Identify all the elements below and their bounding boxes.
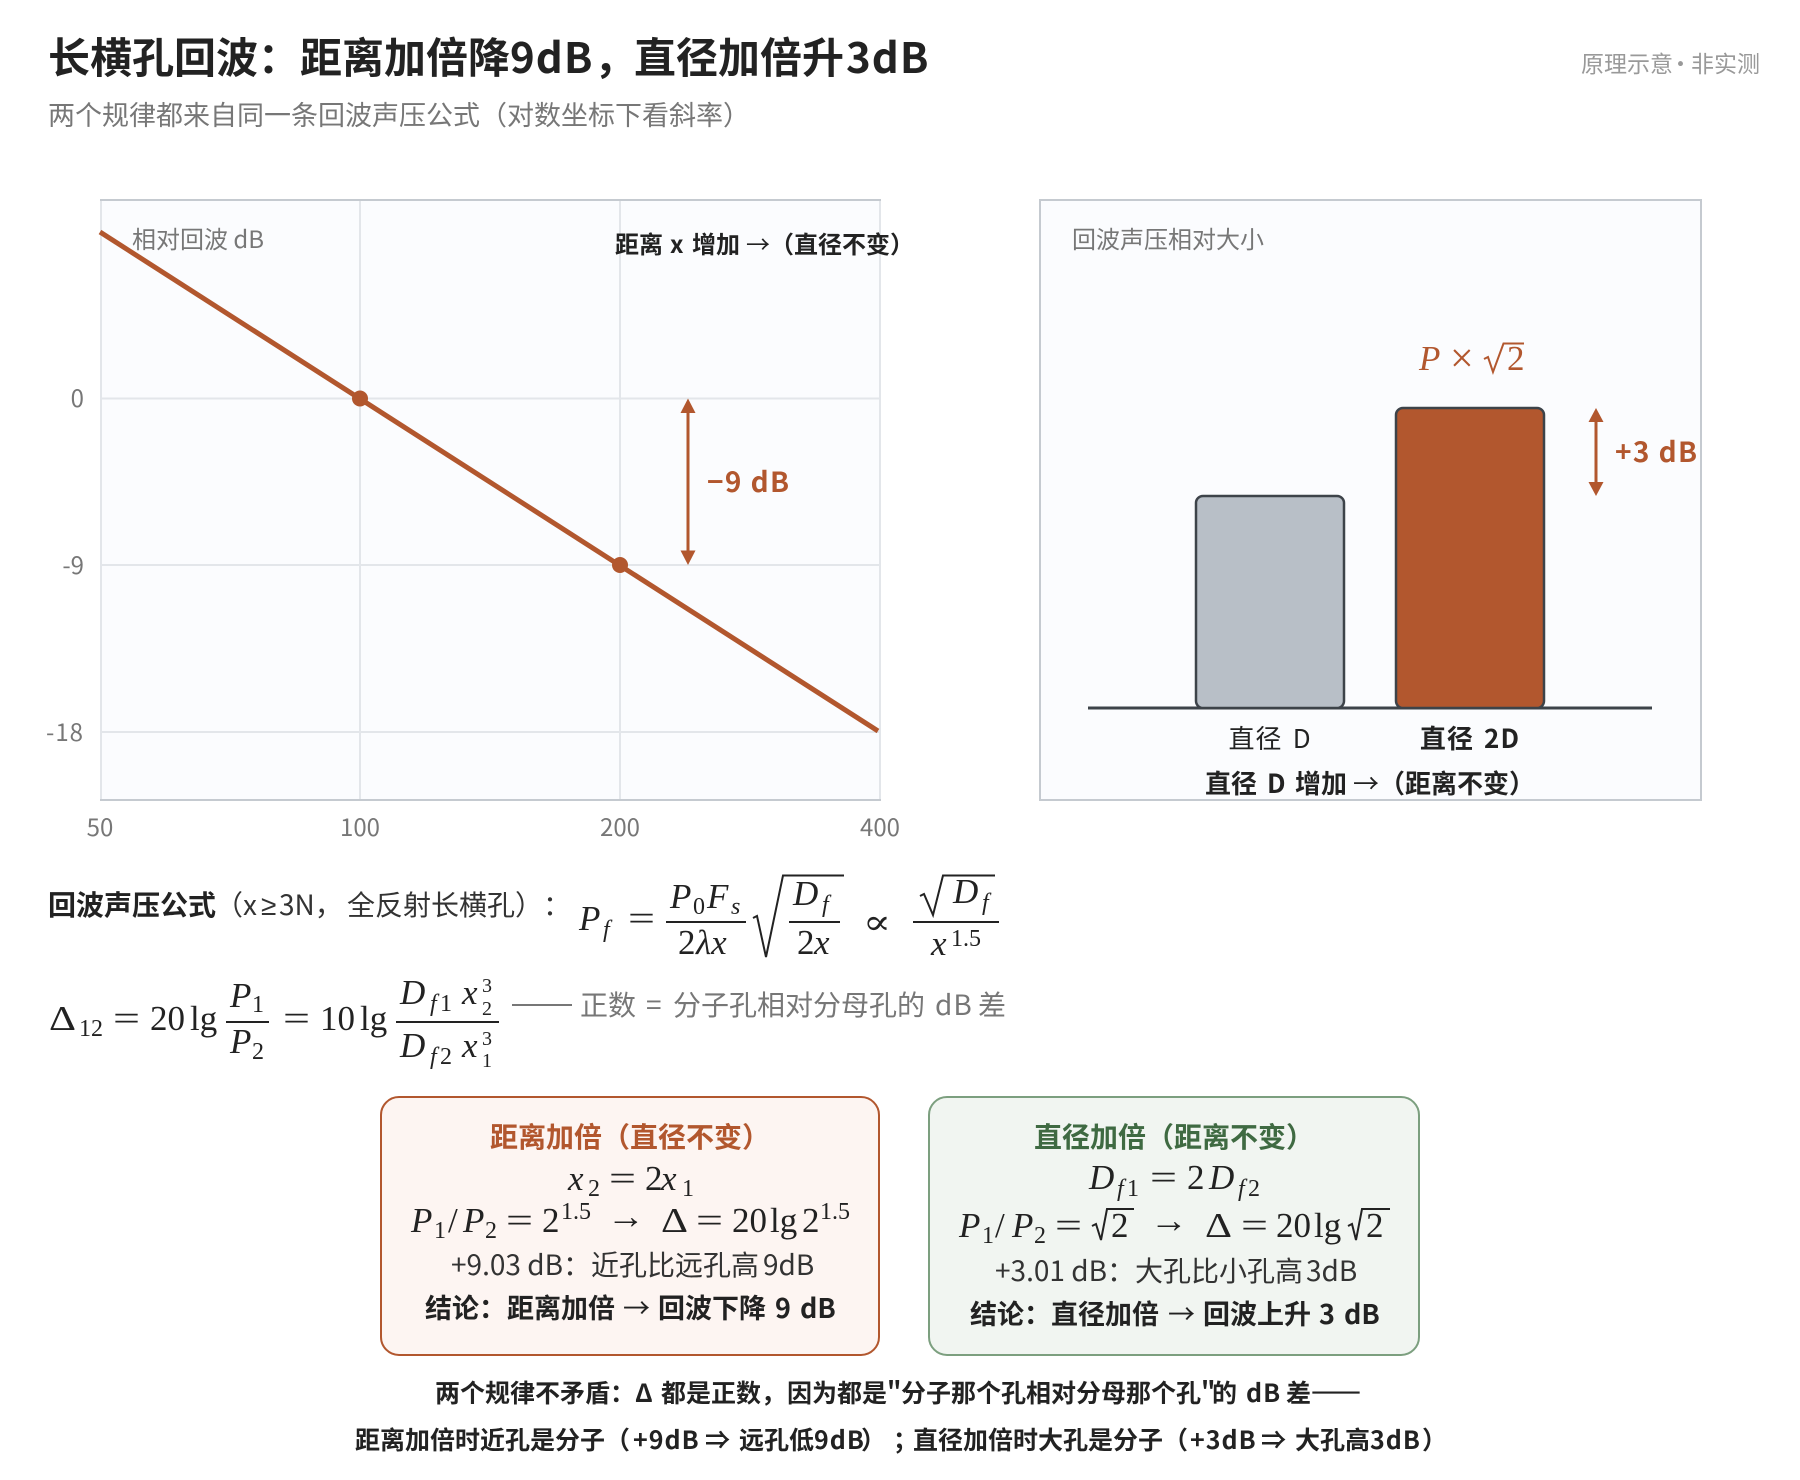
formula line 2: =: [506, 1201, 533, 1240]
formula: delta dB: 2: [440, 1044, 452, 1070]
formula line 1: f: [1238, 1176, 1248, 1202]
formula note: [512, 984, 1006, 1024]
footer note: 远孔低: [739, 1421, 814, 1457]
formula line 1: D: [1088, 1158, 1114, 1197]
footer note: 分子那个孔相对分母那个孔": [901, 1374, 1215, 1410]
arrow: minus 9 dB: [680, 398, 696, 565]
footer note: +9dB: [633, 1421, 700, 1457]
formula: echo pressure: 1.5: [951, 926, 981, 952]
footer note: ⇒: [705, 1421, 730, 1457]
label: plus 3 dB: +3 dB: [1615, 431, 1698, 471]
formula: echo pressure: D: [952, 872, 978, 911]
panel: distance doubling: [381, 1097, 879, 1355]
formula line 2: →: [607, 1197, 645, 1236]
formula: delta dB: P: [229, 976, 251, 1015]
footer note: ）: [861, 1421, 886, 1457]
formula line 2: 1: [982, 1223, 994, 1249]
formula line 2: 1.5: [561, 1199, 591, 1225]
bar: diameter 2D: [1396, 408, 1544, 708]
formula line 1: D: [1208, 1158, 1234, 1197]
conclusion: 距离加倍: [507, 1287, 615, 1326]
arrow: plus 3 dB: [1588, 408, 1604, 496]
formula: delta dB: 12: [79, 1016, 103, 1042]
chart caption: 增加: [1295, 764, 1347, 801]
x axis labels: 50: [87, 808, 113, 843]
y axis title: 相对回波 dB: [132, 220, 264, 255]
formula: delta dB: =: [283, 999, 310, 1038]
formula: echo pressure: F: [706, 877, 729, 916]
panel: diameter bar chart: [1040, 200, 1701, 801]
formula note: 差: [978, 984, 1006, 1024]
x axis labels: [87, 808, 900, 843]
conclusion: dB: [800, 1287, 836, 1326]
footer note: 大孔高: [1295, 1421, 1370, 1457]
y axis labels: -18: [46, 713, 84, 748]
formula line 2: lg: [770, 1201, 797, 1240]
note: schematic only: ·: [1669, 45, 1692, 79]
formula heading: 全反射长横孔）: [347, 884, 543, 924]
formula: P times root 2: [1418, 336, 1524, 382]
formula: delta dB: 1: [252, 992, 264, 1018]
formula line 2: 20: [732, 1201, 767, 1240]
panel title: 回波声压相对大小: [1072, 220, 1264, 255]
formula: echo pressure: f: [603, 917, 613, 943]
formula line 1: 2: [588, 1176, 600, 1202]
conclusion: 9: [775, 1287, 791, 1326]
panel: distance line chart: [46, 200, 914, 843]
y axis labels: 0: [71, 379, 84, 414]
conclusion: 回波下降: [658, 1287, 766, 1326]
conclusion: 结论：: [425, 1287, 506, 1326]
formula line 1: x: [567, 1159, 584, 1198]
formula line 1: =: [609, 1159, 636, 1198]
footer note: 的: [1212, 1374, 1237, 1410]
formula line 2: 20: [1276, 1206, 1311, 1245]
conclusion: →: [623, 1287, 650, 1326]
formula: delta dB: D: [399, 973, 425, 1012]
formula line 2: 2: [802, 1201, 820, 1240]
formula: delta dB: P: [229, 1022, 251, 1061]
formula line 1: f: [1117, 1176, 1127, 1202]
formula line 2: [410, 1197, 850, 1244]
footer note: 因为都是": [787, 1374, 901, 1410]
formula line 2: 1: [434, 1218, 446, 1244]
footer note: 两个规律不矛盾：: [435, 1374, 635, 1410]
footer note: dB: [1246, 1374, 1281, 1410]
formula: delta dB: 2: [482, 998, 492, 1020]
result: 9dB: [763, 1244, 814, 1284]
formula: echo pressure: 2: [797, 923, 814, 962]
formula: delta dB: 1: [482, 1050, 492, 1072]
formula line 2: =: [1055, 1206, 1082, 1245]
formula: echo pressure: x: [930, 924, 947, 963]
label: minus 9 dB: −9 dB: [707, 461, 790, 501]
formula heading: ≥: [261, 890, 276, 921]
footer note: 距离加倍时近孔是分子（: [355, 1421, 630, 1457]
formula: delta dB: 3: [482, 1028, 492, 1050]
formula line 2: /: [995, 1206, 1005, 1245]
formula: P times root 2: P: [1418, 339, 1440, 378]
conclusion: 3: [1319, 1293, 1335, 1332]
footer note: 9dB: [814, 1421, 865, 1457]
formula: echo pressure: ∝: [863, 903, 891, 942]
formula line 2: lg: [1314, 1206, 1341, 1245]
x axis labels: 100: [340, 808, 380, 843]
conclusion: 回波上升: [1203, 1293, 1311, 1332]
formula: delta dB: lg: [360, 999, 387, 1038]
formula line 1: [1088, 1158, 1260, 1202]
note: schematic only: 非实测: [1691, 45, 1760, 79]
formula line 2: Δ: [661, 1201, 688, 1240]
formula line 2: 2: [1034, 1223, 1046, 1249]
formula line 1: 2: [1248, 1176, 1260, 1202]
formula: delta dB: D: [399, 1026, 425, 1065]
panel: diameter doubling: [929, 1097, 1419, 1355]
footer note: 直径加倍时大孔是分子（: [913, 1421, 1188, 1457]
formula: delta dB: 20: [150, 999, 185, 1038]
y axis labels: -9: [62, 546, 84, 581]
formula line 1: 1: [1127, 1176, 1139, 1202]
formula line 2: Δ: [1205, 1206, 1232, 1245]
formula line 2: P: [462, 1201, 484, 1240]
chart caption: →: [746, 225, 770, 260]
chart caption: 距离: [615, 225, 663, 260]
conclusion: 结论：: [970, 1293, 1051, 1332]
formula: echo pressure: 0: [693, 894, 705, 920]
footer note: ）: [1422, 1421, 1447, 1457]
formula: echo pressure: [578, 872, 999, 963]
formula: delta dB: 3: [482, 975, 492, 997]
x axis labels: 400: [860, 808, 900, 843]
subtitle: 两个规律都来自同一条回波声压公式（对数坐标下看斜率）: [48, 94, 750, 133]
formula heading: ：: [543, 884, 571, 924]
formula line 2: [958, 1201, 1390, 1249]
conclusion: dB: [1344, 1293, 1380, 1332]
chart caption: （直径不变）: [770, 225, 914, 260]
formula line 1: =: [1150, 1158, 1177, 1197]
formula note: 分子孔相对分母孔的: [673, 984, 925, 1024]
formula: delta dB: x: [461, 973, 478, 1012]
formula heading: 3N，: [279, 884, 343, 924]
footer note: +3dB: [1190, 1421, 1257, 1457]
formula: echo pressure: s: [731, 894, 740, 920]
formula line 2: 2: [485, 1218, 497, 1244]
title: 长横孔回波：距离加倍降: [48, 25, 510, 86]
formula: echo pressure: f: [822, 892, 832, 918]
formula: echo pressure: P: [578, 899, 600, 938]
formula: echo pressure: =: [628, 899, 655, 938]
formula line 1: [567, 1159, 694, 1202]
formula line 1: 2: [1187, 1158, 1204, 1197]
formula line 2: =: [696, 1201, 723, 1240]
chart caption: D: [1267, 764, 1286, 801]
title: ，: [594, 25, 636, 86]
formula: echo pressure: f: [982, 890, 992, 916]
bar label: D: 直径 D: [1229, 719, 1311, 756]
title: 9dB: [510, 25, 593, 86]
formula: delta dB: Δ: [49, 999, 76, 1038]
formula: P times root 2: 2: [1507, 339, 1524, 378]
footer note: 差: [1286, 1374, 1311, 1410]
title: 直径加倍升: [634, 25, 844, 86]
conclusion: →: [1168, 1293, 1195, 1332]
bar: diameter D: [1196, 496, 1344, 708]
formula heading: 回波声压公式: [48, 884, 216, 924]
formula line 2: 2: [542, 1201, 560, 1240]
formula: delta dB: [49, 973, 499, 1072]
formula line 2: /: [448, 1201, 458, 1240]
formula: delta dB: 10: [320, 999, 355, 1038]
echo line: [100, 232, 878, 731]
chart caption: 直径: [1205, 764, 1257, 801]
formula line 2: 1.5: [820, 1199, 850, 1225]
note: schematic only: 原理示意: [1581, 45, 1673, 79]
formula: delta dB: 2: [252, 1039, 264, 1065]
conclusion: 直径加倍: [1051, 1293, 1159, 1332]
footer note: 都是正数，: [661, 1374, 786, 1410]
formula line 2: →: [1150, 1201, 1188, 1240]
formula: echo pressure: λx: [695, 923, 727, 962]
result: 3dB: [1306, 1250, 1357, 1290]
baseline: [1088, 706, 1652, 710]
title: 3dB: [846, 25, 929, 86]
formula line 2: =: [1241, 1206, 1268, 1245]
result: +9.03 dB：近孔比远孔高: [451, 1244, 759, 1284]
heading: 直径加倍（距离不变）: [1034, 1116, 1314, 1156]
formula: echo pressure: P: [669, 877, 691, 916]
y axis labels: [46, 379, 84, 748]
chart caption: →: [1353, 764, 1379, 801]
formula: delta dB: =: [113, 999, 140, 1038]
formula note: 正数: [580, 984, 636, 1024]
x axis labels: 200: [600, 808, 640, 843]
formula line 2: P: [1011, 1206, 1033, 1245]
formula: P times root 2: ×: [1450, 336, 1474, 382]
formula line 2: 2: [1366, 1206, 1384, 1245]
formula: delta dB: f: [430, 991, 440, 1017]
footer note: 3dB: [1370, 1421, 1421, 1457]
formula: delta dB: x: [461, 1026, 478, 1065]
footer note: ；: [893, 1421, 918, 1457]
heading: 距离加倍（直径不变）: [490, 1116, 770, 1156]
formula line 2: P: [958, 1206, 980, 1245]
formula: echo pressure: D: [792, 874, 818, 913]
result: +3.01 dB：大孔比小孔高: [995, 1250, 1303, 1290]
chart caption: x: [670, 225, 684, 260]
footer note: Δ: [635, 1374, 653, 1410]
formula line 1: x: [660, 1159, 677, 1198]
formula: delta dB: lg: [190, 999, 217, 1038]
formula: echo pressure: x: [813, 923, 830, 962]
bar label: 2D: 直径 2D: [1420, 719, 1520, 756]
formula heading: （: [215, 884, 243, 924]
footer note: [355, 1374, 1447, 1457]
data points: [352, 390, 628, 573]
chart caption: （距离不变）: [1379, 764, 1535, 801]
formula heading: x: [243, 884, 257, 924]
formula: delta dB: f: [430, 1044, 440, 1070]
formula line 1: 1: [682, 1176, 694, 1202]
formula note: dB: [935, 984, 973, 1024]
formula line 2: 2: [1111, 1206, 1128, 1245]
footer note: ⇒: [1261, 1421, 1286, 1457]
formula: delta dB: 1: [440, 991, 452, 1017]
chart caption: 增加: [692, 225, 740, 260]
formula line 1: 2: [645, 1159, 662, 1198]
formula line 2: P: [410, 1201, 432, 1240]
formula note: =: [646, 984, 662, 1024]
footer note: ——: [1311, 1374, 1364, 1410]
formula: echo pressure: 2: [678, 923, 696, 962]
